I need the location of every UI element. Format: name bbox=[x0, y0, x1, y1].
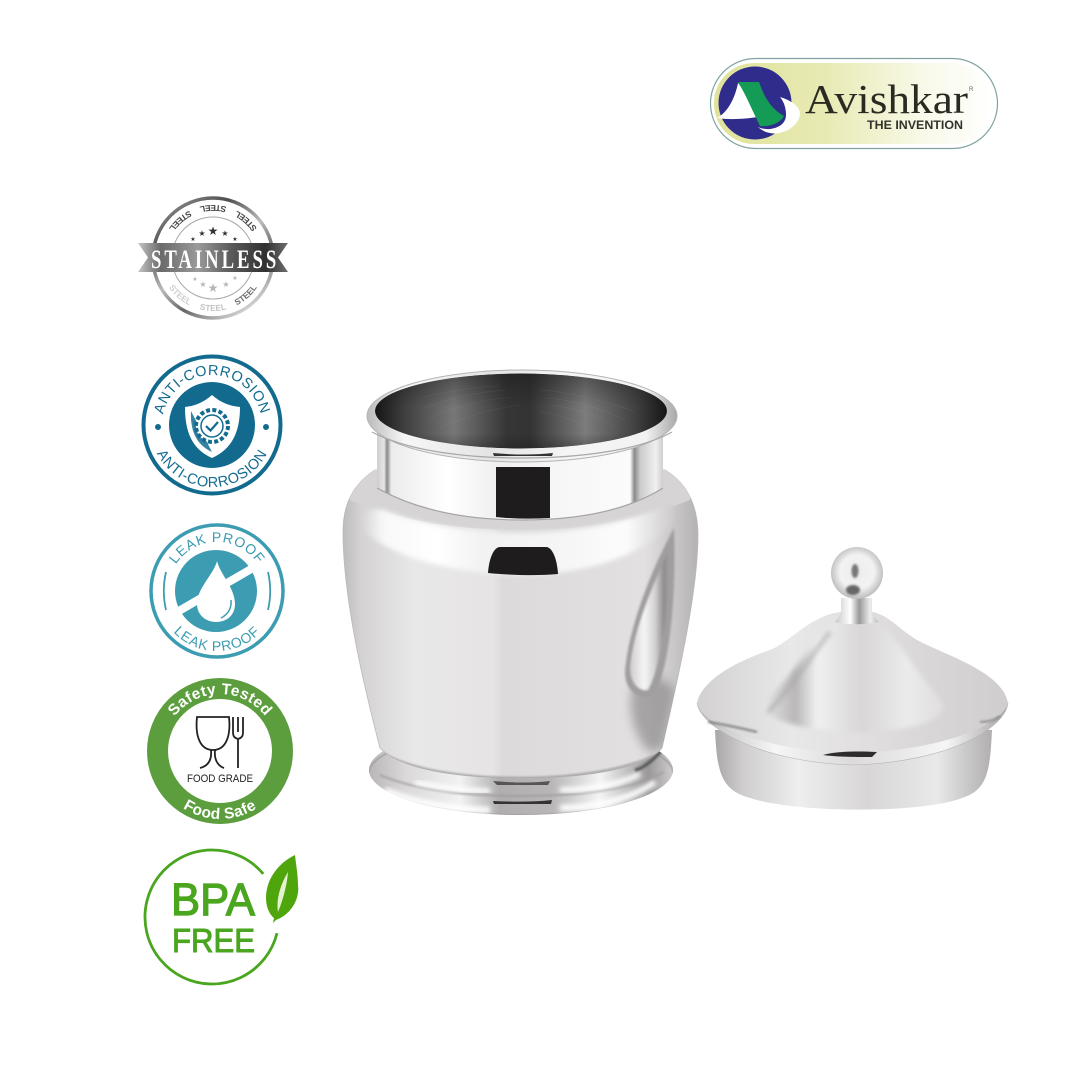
rim notch bbox=[493, 453, 553, 456]
upper stars: ★ bbox=[198, 229, 206, 238]
logo mark bbox=[717, 66, 800, 140]
logo tagline: THE INVENTION bbox=[867, 118, 963, 132]
badge: anti-corrosion bbox=[142, 354, 282, 496]
upper steel labels: STEEL bbox=[169, 211, 192, 230]
lower steel labels bbox=[170, 285, 257, 311]
badge: food grade bbox=[147, 678, 293, 824]
registered mark: R bbox=[969, 87, 974, 93]
lower stars: ★ bbox=[199, 280, 207, 289]
jar rim bbox=[367, 370, 677, 462]
lid dome bbox=[766, 626, 940, 728]
badge: BPA free bbox=[145, 850, 298, 984]
lid skirt bbox=[715, 730, 992, 810]
icon: glass and fork bbox=[197, 717, 243, 768]
upper steel labels: STEEL bbox=[236, 210, 256, 231]
shoulder reflection bbox=[367, 508, 653, 576]
upper stars: ★ bbox=[232, 236, 238, 243]
jar base bbox=[369, 751, 673, 815]
lower steel labels: STEEL bbox=[234, 286, 257, 305]
jar body bbox=[343, 470, 698, 778]
upper stars: ★ bbox=[190, 236, 196, 243]
upper stars: ★ bbox=[208, 224, 218, 238]
neck dark reflection bbox=[496, 467, 550, 519]
lid knob bbox=[831, 547, 883, 599]
upper steel labels bbox=[169, 205, 256, 231]
badge: leak proof bbox=[149, 523, 285, 659]
banner bbox=[138, 243, 288, 272]
jar bbox=[343, 370, 698, 815]
top text: Safety Tested bbox=[168, 683, 273, 716]
bottom text: ANTI-CORROSION bbox=[156, 450, 266, 488]
shoulder dark reflection bbox=[488, 547, 558, 575]
lower stars: ★ bbox=[208, 281, 218, 295]
top text: ANTI-CORROSION bbox=[154, 365, 270, 415]
bottom text: LEAK PROOF bbox=[174, 626, 257, 651]
jar interior bbox=[375, 374, 667, 448]
upper stars: ★ bbox=[221, 229, 229, 238]
body reflections bbox=[350, 470, 690, 778]
badge: stainless steel bbox=[138, 196, 288, 320]
bottom text: Food Safe bbox=[184, 799, 256, 820]
lower stars bbox=[192, 275, 238, 295]
leaf vein bbox=[277, 872, 288, 912]
lower stars: ★ bbox=[192, 276, 198, 283]
lid rim dark notch bbox=[823, 751, 877, 757]
logo: Avishkar bbox=[710, 58, 998, 148]
logo wordmark: Avishkar bbox=[805, 76, 968, 122]
icon: water drop bbox=[197, 561, 235, 622]
lid bbox=[697, 547, 1008, 810]
lid neck bbox=[835, 598, 879, 624]
top text: LEAK PROOF bbox=[168, 532, 265, 564]
upper stars bbox=[190, 224, 238, 243]
lower stars: ★ bbox=[222, 280, 230, 289]
lid rim highlights bbox=[708, 722, 757, 732]
icon: leaf bbox=[266, 855, 298, 923]
lower stars: ★ bbox=[232, 275, 238, 282]
jar neck bbox=[377, 425, 663, 520]
icon: shield bbox=[185, 395, 240, 458]
BPA text: BPA bbox=[171, 874, 255, 925]
upper steel labels: STEEL bbox=[200, 205, 226, 212]
banner text: STAINLESS bbox=[151, 245, 276, 274]
food grade label: FOOD GRADE bbox=[187, 773, 253, 785]
lower steel labels: STEEL bbox=[170, 285, 190, 306]
lid brim bbox=[697, 703, 1008, 765]
FREE text: FREE bbox=[172, 922, 255, 959]
jar handle bbox=[625, 528, 675, 697]
lower steel labels: STEEL bbox=[200, 304, 226, 311]
